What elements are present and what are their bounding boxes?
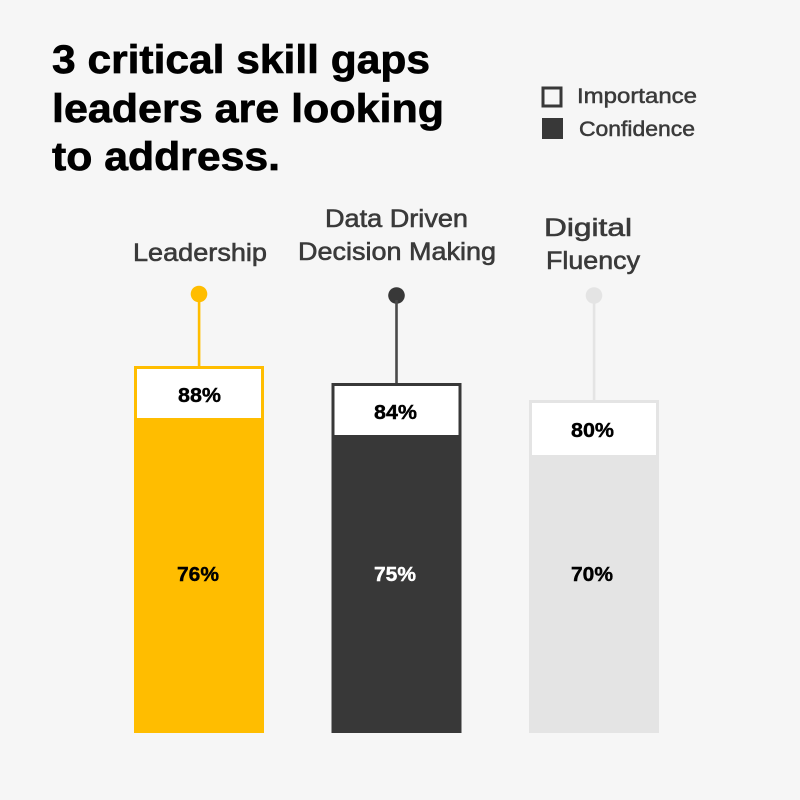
title: leaders are looking [52, 87, 444, 131]
legend: confidence: Confidence [579, 118, 695, 141]
pin: Data Driven Decision Making [388, 287, 405, 385]
importance box: Digital Fluency [532, 403, 656, 455]
value: 84%: 84% [374, 402, 417, 424]
column: Leadership [133, 239, 267, 733]
bar: Data Driven Decision Making [332, 383, 462, 733]
title [52, 38, 444, 179]
legend: importance [543, 85, 697, 108]
value: 80%: 80% [571, 420, 614, 442]
value: 75%: 75% [374, 564, 416, 586]
importance box: Leadership [137, 369, 261, 418]
value: 70%: 70% [571, 564, 613, 586]
title: to address. [52, 135, 280, 179]
legend [542, 85, 697, 141]
label: Digital Fluency: Fluency [546, 247, 641, 275]
pin: Digital Fluency [586, 287, 602, 402]
value: 88%: 88% [178, 385, 221, 407]
label: Data Driven Decision Making: Data Driven [325, 205, 468, 233]
bar: Digital Fluency [529, 400, 659, 733]
label: Digital Fluency [544, 214, 641, 275]
label: Data Driven Decision Making [298, 205, 496, 266]
title: 3 critical skill gaps [52, 38, 430, 82]
legend: importance: Importance [577, 85, 697, 108]
label: Data Driven Decision Making: Decision Making [298, 238, 496, 266]
value: 76%: 76% [177, 564, 219, 586]
bar: Leadership [134, 366, 264, 733]
column: Data Driven Decision Making [298, 205, 496, 733]
label: Leadership: Leadership [133, 239, 267, 267]
label: Digital Fluency: Digital [544, 214, 632, 242]
legend: confidence [542, 118, 695, 141]
pin: Leadership [191, 286, 207, 368]
column: Digital Fluency [529, 214, 659, 733]
importance box: Data Driven Decision Making [334, 386, 458, 435]
